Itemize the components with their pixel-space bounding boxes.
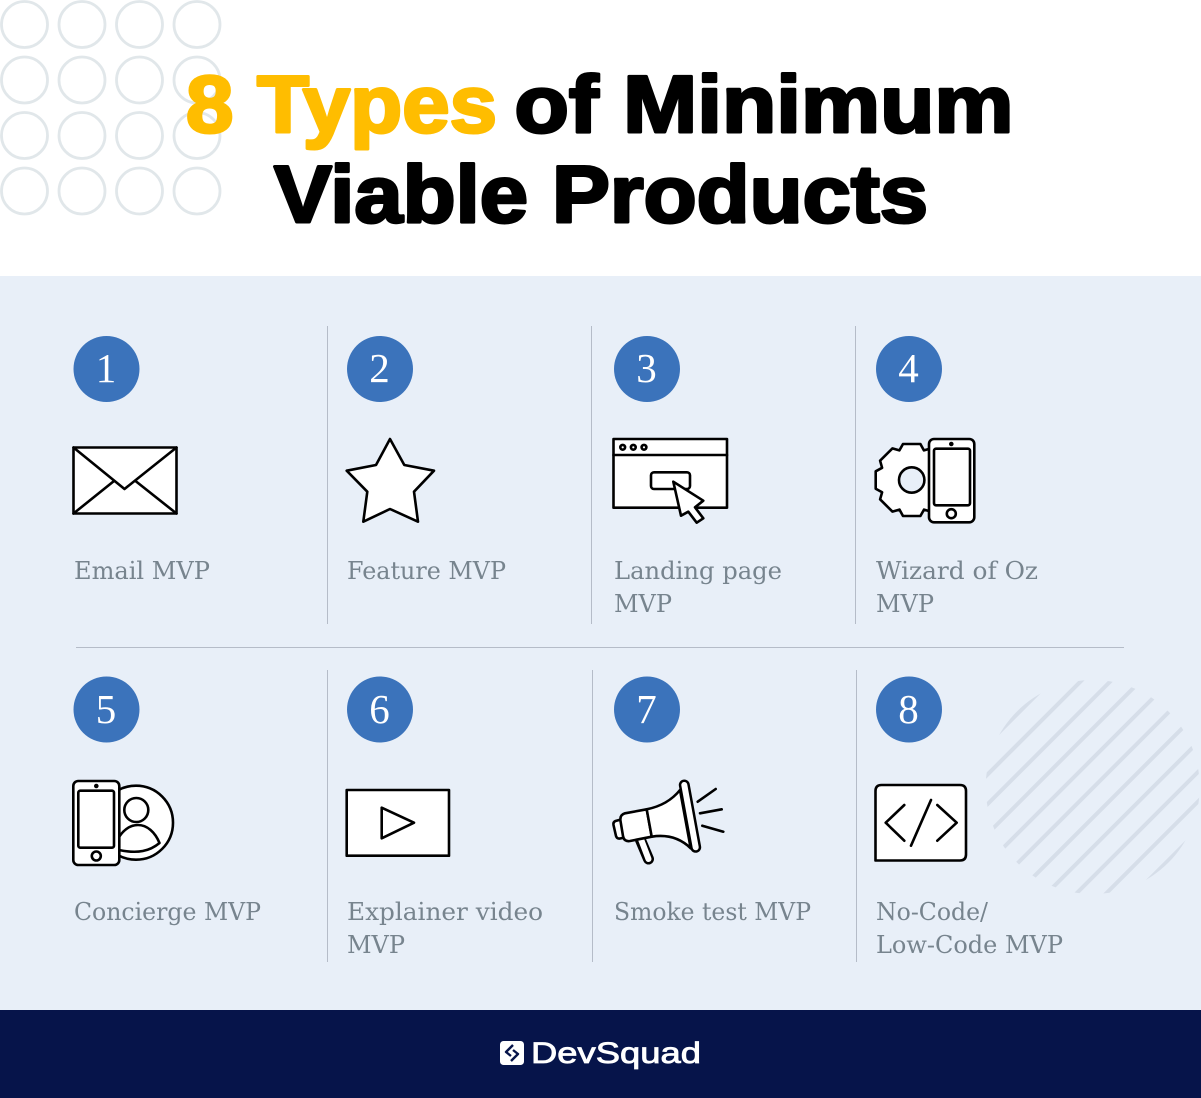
item 8: No-Code/Low-Code MVP: No-Code/ xyxy=(876,898,989,926)
icon: gear and phone xyxy=(876,439,974,522)
item 8: No-Code/Low-Code MVP: Low-Code MVP xyxy=(876,931,1063,959)
striped circle decoration xyxy=(986,680,1199,894)
footer bar xyxy=(0,1010,1201,1098)
item 3: Landing page MVP xyxy=(614,336,782,618)
item 8: No-Code/Low-Code MVP xyxy=(876,676,1063,959)
item 8: No-Code/Low-Code MVP: 8 xyxy=(898,686,919,732)
title: 8 Types xyxy=(186,60,497,150)
icon: phone and person xyxy=(73,781,173,865)
item 6: Explainer video MVP: 6 xyxy=(369,686,390,732)
item 6: Explainer video MVP: Explainer video xyxy=(347,898,543,926)
icon: envelope xyxy=(74,448,176,514)
logo wordmark: DevSquad xyxy=(531,1037,701,1070)
item 1: Email MVP: 1 xyxy=(96,345,116,391)
item 2: Feature MVP: 2 xyxy=(369,345,390,391)
icon: DevSquad logo xyxy=(500,1041,524,1065)
title xyxy=(186,60,1014,240)
item 3: Landing page MVP: 3 xyxy=(636,345,657,391)
item 4: Wizard of Oz MVP xyxy=(876,336,1038,618)
item 4: Wizard of Oz MVP: MVP xyxy=(876,590,934,618)
item 5: Concierge MVP: Concierge MVP xyxy=(74,898,261,926)
item 3: Landing page MVP: MVP xyxy=(614,590,672,618)
item 1: Email MVP: Email MVP xyxy=(74,557,210,585)
item 1: Email MVP xyxy=(74,336,210,585)
decorative circle grid xyxy=(2,2,220,214)
panel: MVP types xyxy=(0,276,1201,1010)
item 6: Explainer video MVP: MVP xyxy=(347,931,405,959)
item 2: Feature MVP xyxy=(347,336,506,585)
item 7: Smoke test MVP xyxy=(613,676,811,926)
icon: star xyxy=(347,439,434,522)
icon: code window xyxy=(876,785,966,860)
item 7: Smoke test MVP: Smoke test MVP xyxy=(614,898,811,926)
item 4: Wizard of Oz MVP: Wizard of Oz xyxy=(876,557,1038,585)
item 7: Smoke test MVP: 7 xyxy=(636,686,657,732)
item 5: Concierge MVP xyxy=(73,676,261,926)
item 4: Wizard of Oz MVP: 4 xyxy=(898,345,919,391)
item 2: Feature MVP: Feature MVP xyxy=(347,557,506,585)
icon: megaphone xyxy=(613,785,723,859)
item 6: Explainer video MVP xyxy=(347,676,543,959)
icon: browser with cursor xyxy=(614,439,727,523)
icon: video player xyxy=(347,790,449,856)
item 5: Concierge MVP: 5 xyxy=(96,686,116,732)
title: Viable Products xyxy=(274,150,928,240)
title: of Minimum xyxy=(514,60,1014,150)
item 3: Landing page MVP: Landing page xyxy=(614,557,782,585)
